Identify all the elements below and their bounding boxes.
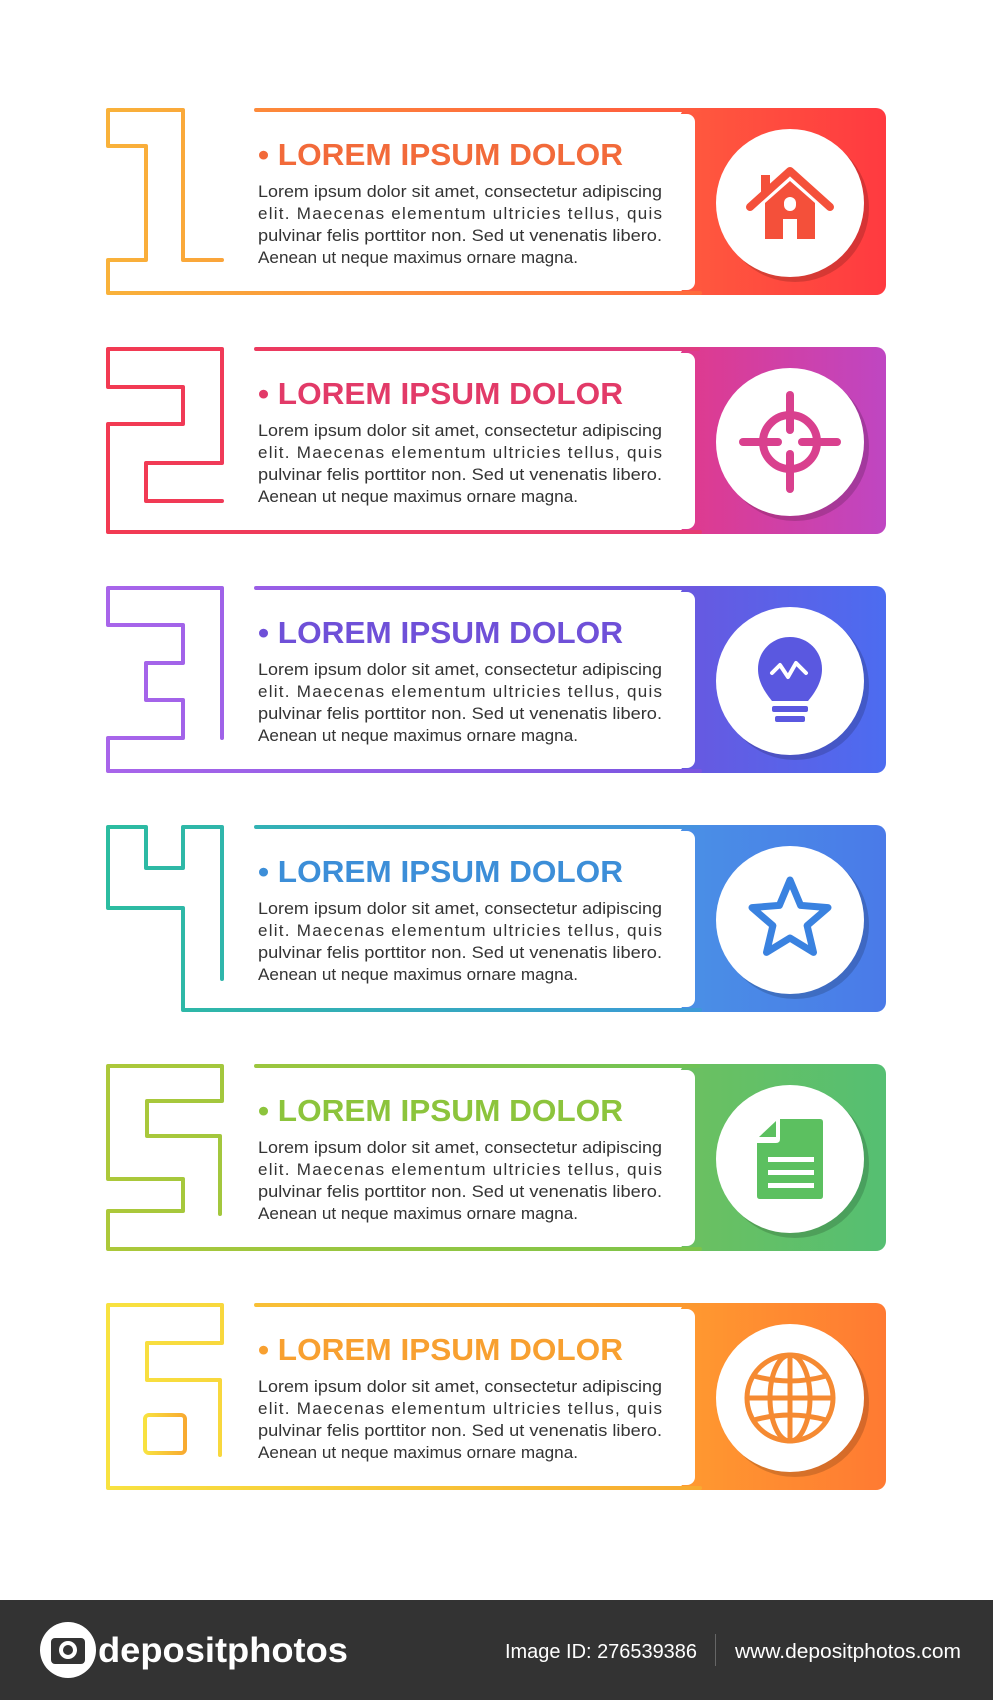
top line [254,825,700,829]
body text: pulvinar felis porttitor non. Sed ut venenatis libero. [258,943,662,962]
row 3 [108,586,886,773]
row 1 [108,108,886,295]
top line [254,586,700,590]
panel: colored right block [680,1303,886,1490]
body text [258,660,662,745]
body text [258,899,662,984]
white text box [250,1309,695,1485]
body text: pulvinar felis porttitor non. Sed ut venenatis libero. [258,226,662,245]
heading: • LOREM IPSUM DOLOR [258,615,623,650]
number outline 4 [108,827,700,1010]
body text: pulvinar felis porttitor non. Sed ut venenatis libero. [258,704,662,723]
body text: pulvinar felis porttitor non. Sed ut venenatis libero. [258,465,662,484]
number outline 2 [108,349,700,532]
body text: Lorem ipsum dolor sit amet, consectetur adipiscing [258,1377,662,1396]
body text: elit. Maecenas elementum ultricies tellus, quis [258,1399,662,1418]
number outline 3 [108,588,700,771]
footer logo icon [40,1622,96,1678]
number outline 5 [108,1066,700,1249]
white text box [250,1070,695,1246]
white text box [250,114,695,290]
icon: house [716,129,869,282]
number outline 6 [108,1305,700,1488]
top line [254,1064,700,1068]
row 4 [108,825,886,1012]
icon: globe [716,1324,869,1477]
icon: star [716,846,869,999]
body text: Lorem ipsum dolor sit amet, consectetur adipiscing [258,660,662,679]
body text: Aenean ut neque maximus ornare magna. [258,965,578,984]
white text box [250,353,695,529]
white text box [250,831,695,1007]
heading: • LOREM IPSUM DOLOR [258,1093,623,1128]
row 6 [108,1303,886,1490]
body text: Aenean ut neque maximus ornare magna. [258,248,578,267]
body text [258,421,662,506]
body text: elit. Maecenas elementum ultricies tellus, quis [258,1160,662,1179]
panel: colored right block [680,1064,886,1251]
heading: • LOREM IPSUM DOLOR [258,854,623,889]
body text: Lorem ipsum dolor sit amet, consectetur adipiscing [258,421,662,440]
body text [258,1377,662,1462]
body text: elit. Maecenas elementum ultricies tellus, quis [258,682,662,701]
top line [254,347,700,351]
body text: Aenean ut neque maximus ornare magna. [258,726,578,745]
icon: light bulb [716,607,869,760]
footer brand: depositphotos [98,1631,348,1670]
body text: Aenean ut neque maximus ornare magna. [258,1204,578,1223]
panel: colored right block [680,586,886,773]
top line [254,108,700,112]
heading: • LOREM IPSUM DOLOR [258,376,623,411]
icon: crosshair [716,368,869,521]
heading: • LOREM IPSUM DOLOR [258,1332,623,1367]
footer bar [0,1600,993,1700]
panel: colored right block [680,825,886,1012]
body text: Lorem ipsum dolor sit amet, consectetur adipiscing [258,182,662,201]
body text: Lorem ipsum dolor sit amet, consectetur adipiscing [258,1138,662,1157]
footer image id: Image ID: 276539386 [505,1641,697,1663]
body text: elit. Maecenas elementum ultricies tellus, quis [258,921,662,940]
top line [254,1303,700,1307]
footer url: www.depositphotos.com [734,1641,961,1663]
body text: pulvinar felis porttitor non. Sed ut venenatis libero. [258,1182,662,1201]
icon: document [716,1085,869,1238]
body text [258,1138,662,1223]
row 5 [108,1064,886,1251]
panel: colored right block [680,347,886,534]
number outline 1 [108,110,700,293]
white text box [250,592,695,768]
body text: Lorem ipsum dolor sit amet, consectetur adipiscing [258,899,662,918]
body text: elit. Maecenas elementum ultricies tellus, quis [258,443,662,462]
body text: pulvinar felis porttitor non. Sed ut venenatis libero. [258,1421,662,1440]
row 2 [108,347,886,534]
body text [258,182,662,267]
body text: Aenean ut neque maximus ornare magna. [258,487,578,506]
heading: • LOREM IPSUM DOLOR [258,137,623,172]
body text: Aenean ut neque maximus ornare magna. [258,1443,578,1462]
body text: elit. Maecenas elementum ultricies tellus, quis [258,204,662,223]
panel: colored right block [680,108,886,295]
